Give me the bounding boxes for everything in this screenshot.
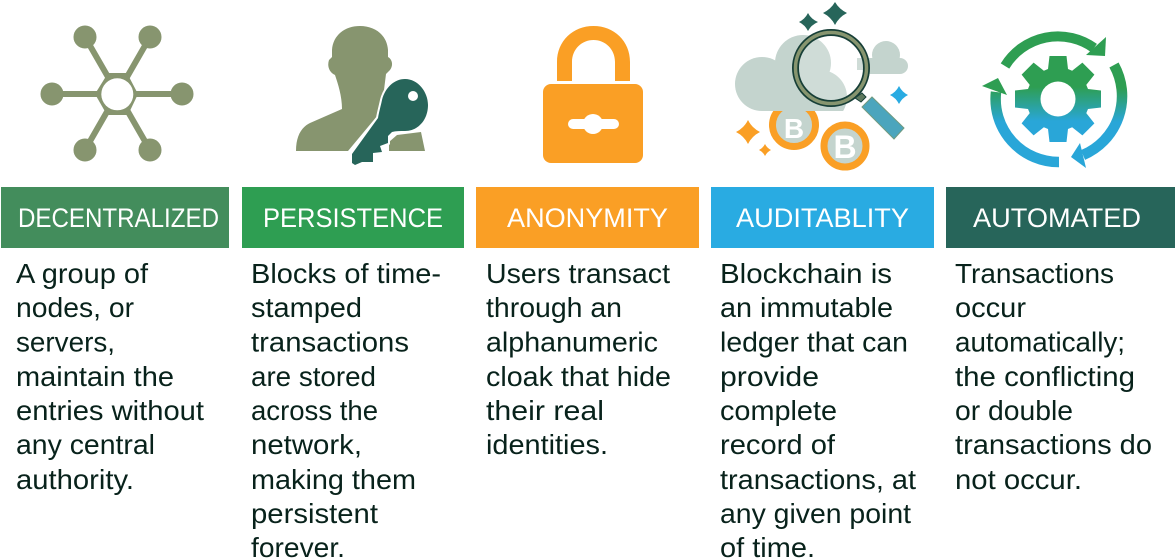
icon: cloud, magnifier and coins: [735, 2, 908, 167]
text: persistence description: are stored: [251, 361, 376, 392]
heading: automated: [946, 187, 1175, 248]
text: persistence description: persistent: [251, 498, 378, 529]
text: persistence description: [251, 258, 441, 559]
text: persistence description: network,: [251, 429, 362, 460]
icon: cloud, magnifier and coins: B: [784, 113, 804, 144]
text: auditability description: an immutable: [720, 292, 893, 323]
icon: person with key: [296, 26, 428, 165]
text: automated description: or double: [955, 395, 1073, 426]
text: decentralized description: entries without: [16, 395, 204, 426]
text: anonymity description: alphanumeric: [486, 326, 658, 358]
text: auditability description: transactions, at: [720, 464, 916, 495]
icon: cloud, magnifier and coins: B: [833, 129, 857, 165]
heading: auditablity: [711, 187, 934, 248]
text: decentralized description: maintain the: [16, 361, 174, 392]
text: automated description: occur: [955, 292, 1026, 323]
text: anonymity description: identities.: [486, 429, 608, 460]
text: anonymity description: Users transact: [486, 258, 670, 289]
text: decentralized description: any central: [16, 429, 155, 460]
text: auditability description: record of: [720, 429, 835, 460]
heading: persistence: PERSISTENCE: [263, 203, 443, 233]
heading: decentralized: DECENTRALIZED: [18, 203, 219, 233]
text: auditability description: any given point: [720, 498, 911, 529]
text: anonymity description: through an: [486, 292, 622, 323]
text: anonymity description: their real: [486, 395, 604, 426]
text: anonymity description: cloak that hide: [486, 361, 671, 392]
text: decentralized description: A group of: [16, 258, 148, 289]
text: automated description: [955, 258, 1152, 495]
text: auditability description: Blockchain is: [720, 258, 892, 289]
text: persistence description: making them: [251, 464, 416, 495]
text: persistence description: across the: [251, 395, 378, 426]
text: anonymity description: [486, 258, 671, 460]
text: automated description: transactions do: [955, 429, 1152, 460]
text: auditability description: ledger that can: [720, 326, 908, 358]
heading: auditablity: AUDITABLITY: [736, 203, 909, 233]
text: decentralized description: servers,: [16, 326, 115, 358]
icon: network nodes: [41, 26, 193, 161]
text: auditability description: [720, 258, 916, 559]
icon: padlock: [543, 26, 643, 163]
heading: automated: AUTOMATED: [973, 203, 1141, 233]
text: persistence description: transactions: [251, 326, 409, 358]
text: auditability description: complete: [720, 395, 837, 426]
heading: anonymity: ANONYMITY: [507, 203, 668, 233]
text: decentralized description: [16, 258, 204, 495]
icon: gear with cycle arrows: [982, 36, 1122, 168]
text: persistence description: Blocks of time-: [251, 258, 441, 289]
heading: persistence: [242, 187, 464, 248]
heading: decentralized: [1, 187, 229, 248]
heading: anonymity: [476, 187, 699, 248]
text: decentralized description: authority.: [16, 464, 134, 495]
text: automated description: not occur.: [955, 464, 1082, 495]
text: automated description: the conflicting: [955, 361, 1135, 392]
text: decentralized description: nodes, or: [16, 292, 134, 323]
text: automated description: Transactions: [955, 258, 1114, 289]
text: persistence description: stamped: [251, 292, 362, 323]
text: auditability description: provide: [720, 361, 819, 392]
text: automated description: automatically;: [955, 326, 1125, 358]
